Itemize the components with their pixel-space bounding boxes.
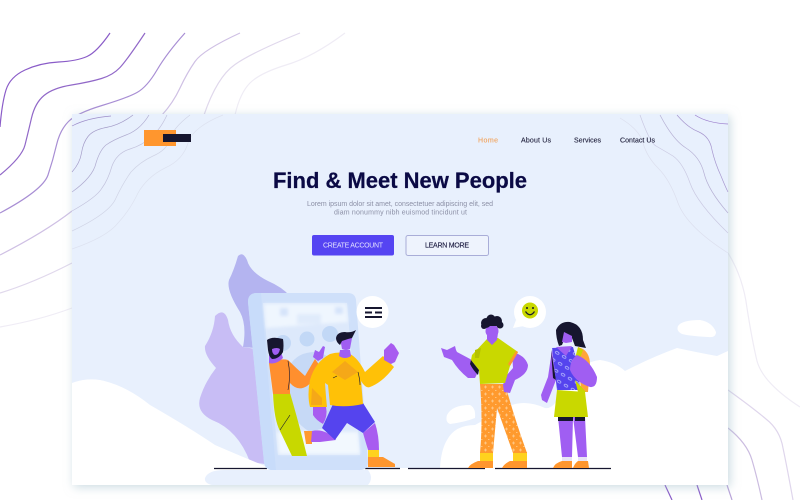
white hills: [72, 348, 728, 485]
ground blob: [205, 470, 371, 485]
panel: landing page: [72, 114, 728, 485]
navigation menu: [478, 138, 656, 144]
description text: diam nonummy nibh euismod tincidunt ut: [334, 210, 467, 216]
person: woman with backpack: [541, 322, 597, 468]
button: create account: CREATE ACCOUNT: [323, 242, 384, 250]
navigation menu: Home: [478, 138, 498, 144]
person: man in yellow sweater: [304, 330, 399, 467]
ground line: [214, 468, 611, 470]
phone: [248, 293, 368, 470]
logo: [144, 130, 191, 146]
button: create account: [312, 235, 394, 256]
navigation menu: Contact Us: [620, 138, 656, 144]
back leaf: [228, 254, 290, 350]
title: Find & Meet New People: [273, 168, 527, 193]
navigation menu: Services: [574, 138, 602, 144]
person: man in orange: [267, 338, 325, 456]
speech bubble: smiley: [513, 296, 546, 328]
description text: [307, 201, 493, 216]
button: learn more: [406, 236, 488, 256]
white blobs: [446, 320, 716, 424]
description text: Lorem ipsum dolor sit amet, consectetuer adipiscing elit, sed: [307, 201, 493, 208]
person: man in lime shirt: [441, 314, 528, 468]
speech bubble: menu: [356, 296, 388, 328]
navigation menu: About Us: [521, 138, 552, 144]
front leaf: [199, 312, 272, 465]
panel contour lines: [72, 115, 728, 253]
button: learn more: LEARN MORE: [425, 242, 469, 250]
